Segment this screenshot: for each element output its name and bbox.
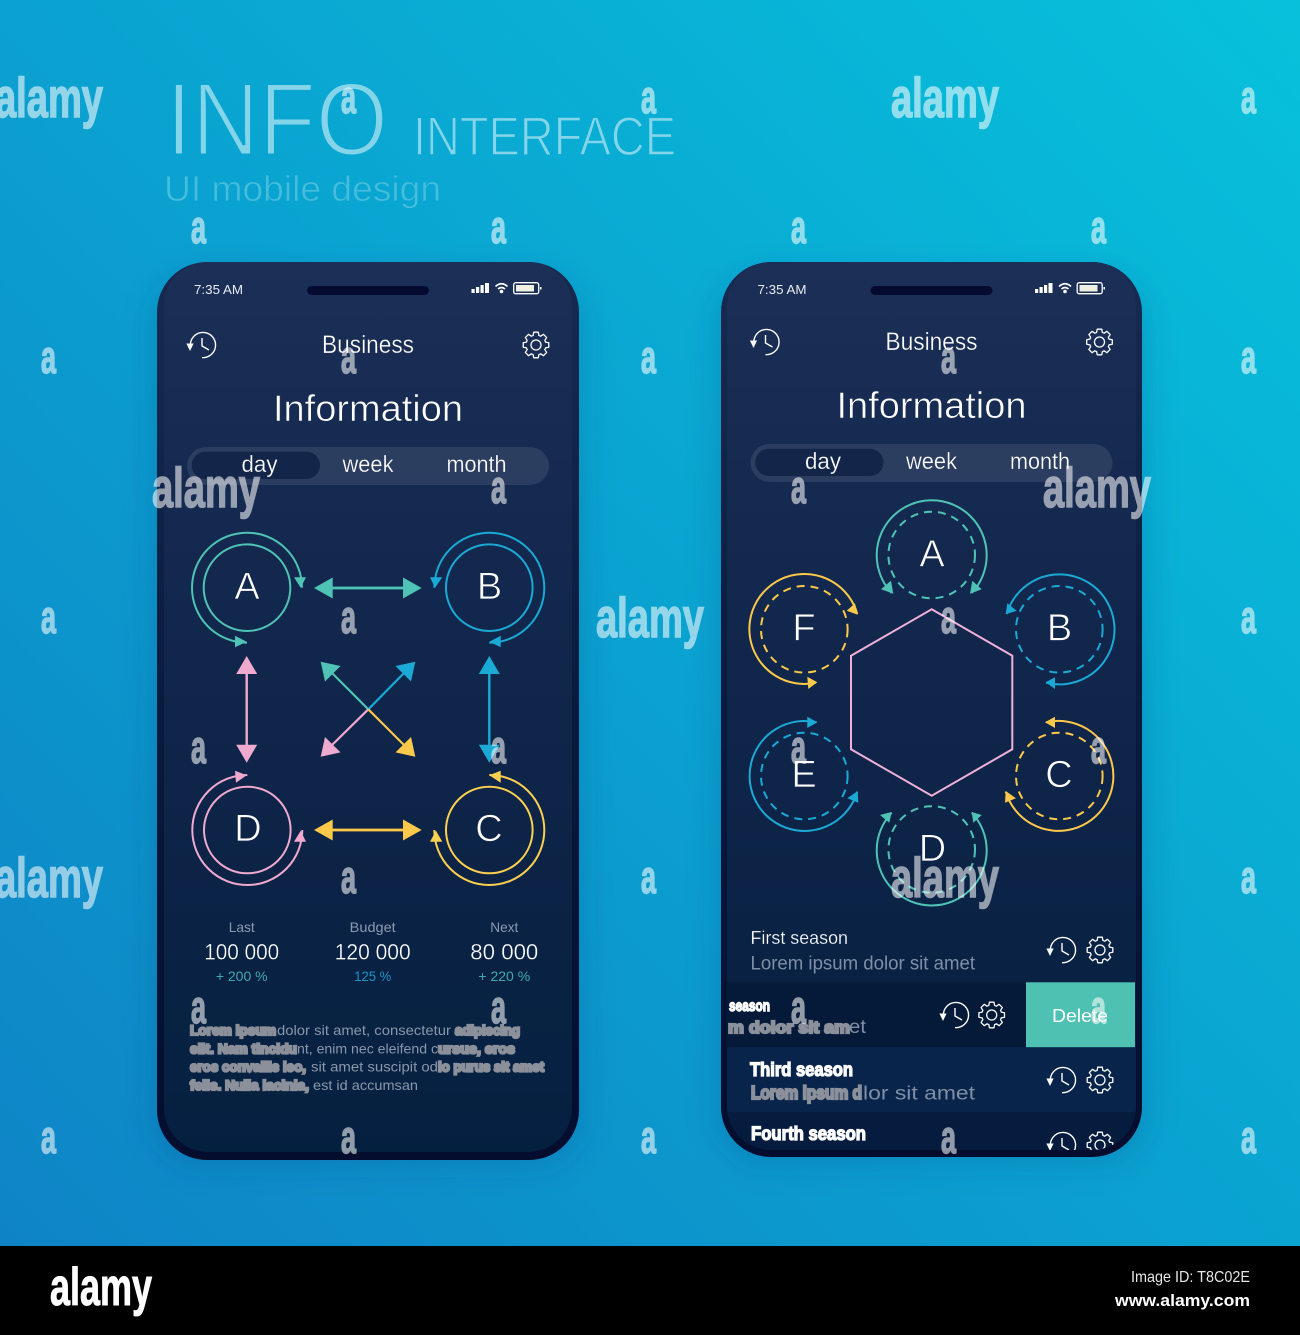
watermarks: a [941,591,956,643]
node B [430,533,544,647]
paragraph: felis. Nulla lacinia, [190,1077,309,1093]
period tabs: day [805,448,841,474]
stat: Budget: Budget [350,919,396,935]
stat: Budget [335,919,411,984]
status bar [758,282,1105,297]
watermarks: alamy [891,66,999,129]
watermarks: a [341,1111,356,1163]
watermarks: a [491,461,506,513]
node A: A [234,566,260,608]
node E [750,717,858,831]
watermarks: a [491,981,506,1033]
stat: Last [204,919,279,984]
row: Third season: lor sit amet [863,1084,976,1104]
battery icon [1077,283,1105,294]
phone 1 shadow [150,272,586,1168]
watermarks: a [41,331,56,383]
row: Third season [727,1047,1136,1112]
paragraph: nt, enim nec eleifend c [297,1040,438,1056]
watermarks: a [791,461,806,513]
node E: E [791,754,817,796]
season list [727,928,1136,1158]
delete button: Delete [1052,1006,1108,1026]
watermarks: a [641,851,656,903]
watermarks: a [941,1111,956,1163]
hexagon [851,609,1012,796]
node D [192,771,306,885]
watermarks: a [41,1111,56,1163]
row: Fourth season: Fourth season [751,1124,866,1145]
subtitle: UI mobile design [164,168,441,209]
watermarks: a [791,721,806,773]
watermarks: a [1241,1111,1256,1163]
phone 2 body [721,262,1142,1157]
stat: Next [470,919,538,984]
node C: C [475,808,503,850]
paragraph: dolor sit amet, consectetur [277,1022,451,1038]
stat: Last: + 200 % [216,968,268,984]
watermarks: alamy [1043,456,1151,519]
heading: Business: Business [886,328,978,356]
node A [877,500,987,598]
watermarks: a [341,331,356,383]
footer bar [0,1246,1300,1335]
watermarks: a [791,981,806,1033]
title: INFO: INFO [166,62,388,178]
time: 7:35 AM [194,282,243,297]
crossing arrows [321,662,415,757]
watermarks: a [191,721,206,773]
node D: D [234,808,262,850]
stat: Budget: 125 % [354,968,391,984]
stat: Next: Next [490,919,518,935]
stat: Budget: 120 000 [335,940,411,964]
watermarks: a [191,981,206,1033]
row: First season: Lorem ipsum dolor sit amet [750,954,976,974]
node B: B [477,566,502,608]
row: Third season: Third season [750,1060,853,1081]
row: second season (swiped): et [849,1017,867,1038]
website: www.alamy.com [1114,1291,1250,1310]
row: second season (swiped) [727,982,1135,1047]
node B [1006,574,1115,689]
watermarks: a [1241,591,1256,643]
node F [749,574,858,689]
period tabs: week [905,448,957,474]
paragraph: elit. Nam tincidu [190,1040,297,1056]
node F: F [792,608,816,650]
paragraph: sit amet suscipit od [311,1059,438,1075]
node D: D [919,828,946,870]
heading: Information: Information [273,388,463,429]
phone 2 screen [727,262,1136,1150]
watermarks: a [491,721,506,773]
paragraph: ursus, eros [438,1040,515,1056]
watermarks: a [341,851,356,903]
notch [307,286,429,295]
phone 1 body [157,262,579,1160]
heading: Information: Information [836,385,1026,426]
footer logo: alamy [50,1258,152,1317]
node C [1005,717,1113,831]
watermarks: alamy [596,586,704,649]
period tabs: day [242,451,278,477]
title block [164,62,676,209]
watermarks: a [641,1111,656,1163]
watermarks: a [1241,331,1256,383]
paragraph: eros convallis leo, [190,1059,306,1075]
row: second season (swiped): m dolor sit am [728,1018,850,1037]
signal icon [472,283,489,293]
watermarks: a [341,591,356,643]
paragraph: Lorem ipsum [190,1022,276,1038]
stat: Last: Last [229,919,255,935]
node D [877,806,987,905]
watermarks: a [1091,721,1106,773]
watermarks: a [641,331,656,383]
notch [870,286,992,295]
row: Third season: Lorem ipsum d [751,1083,862,1103]
period tabs [187,447,549,485]
phone 2 [714,262,1150,1166]
node A: A [919,534,945,576]
delete button [1026,982,1135,1047]
paragraph: io purus sit amet [438,1059,544,1075]
watermarks: a [1091,981,1106,1033]
phone 1 screen [164,262,572,1152]
period tabs [750,444,1112,482]
icon: settings [523,332,549,358]
battery icon [514,283,542,294]
node C: C [1045,754,1073,796]
stat: Next: 80 000 [470,940,538,964]
watermarks: a [641,71,656,123]
row: second season (swiped): season [729,998,770,1015]
watermarks: a [41,591,56,643]
arrow: A to D [236,656,257,763]
time: 7:35 AM [758,282,806,297]
phone 1 [150,262,586,1168]
arrow: B to C [479,656,500,763]
watermarks [0,66,1256,1163]
wifi icon [1059,284,1071,292]
watermarks: a [341,71,356,123]
wifi icon [496,284,508,292]
watermarks: a [491,201,506,253]
watermarks: a [941,331,956,383]
icon: history [750,329,779,355]
watermarks: alamy [152,456,260,519]
stat: Next: + 220 % [478,968,530,984]
row: Fourth season [752,1125,1114,1150]
period tabs: week [342,451,394,477]
image id: Image ID: T8C02E [1131,1269,1250,1286]
watermarks: a [1241,71,1256,123]
row: First season: First season [750,928,848,948]
paragraph [190,1022,544,1093]
icon: settings [1087,329,1112,355]
paragraph: adipiscing [455,1022,520,1038]
node A [192,533,306,647]
signal icon [1035,283,1052,293]
watermarks: a [1241,851,1256,903]
watermarks: alamy [891,846,999,909]
watermarks: a [1091,201,1106,253]
phone 2 shadow [714,272,1150,1166]
stat: Last: 100 000 [204,940,279,964]
heading: Business: Business [322,331,414,359]
row: First season [750,928,1113,974]
node B: B [1047,608,1072,650]
title: INTERFACE: INTERFACE [413,105,676,167]
arrow: D to C [314,820,422,840]
period tabs: month [1010,448,1070,474]
icon: history [186,332,216,358]
arrow: A to B [314,578,422,598]
watermarks: a [791,201,806,253]
period tabs: month [446,451,506,477]
status bar [194,282,542,297]
node C [430,771,544,885]
paragraph: est id accumsan [313,1077,418,1093]
watermarks: a [191,201,206,253]
